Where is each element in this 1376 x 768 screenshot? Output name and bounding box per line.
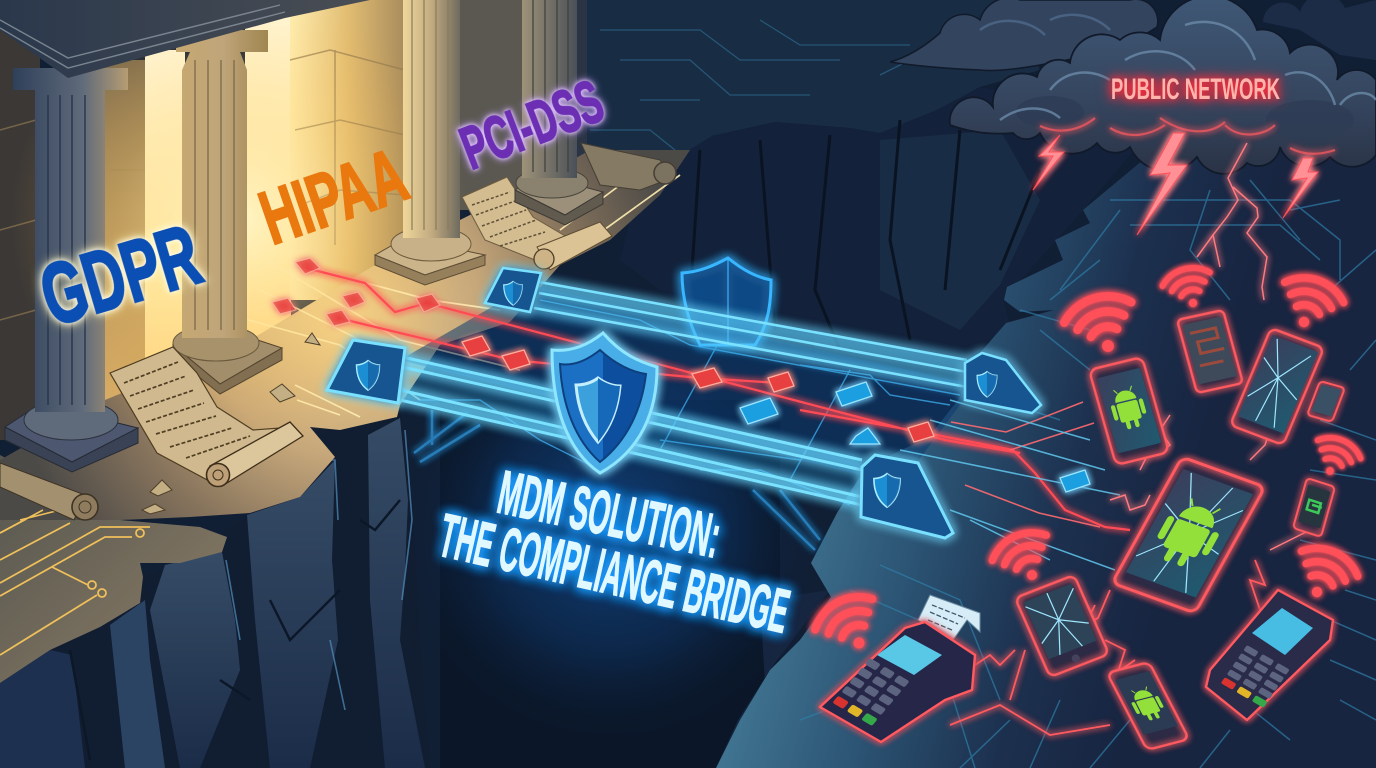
back shield	[682, 258, 771, 345]
anchor block: front right	[861, 455, 953, 538]
temple back wall	[0, 0, 587, 440]
title: MDM solution: MDM SOLUTION:	[492, 458, 726, 572]
pillar 3	[375, 0, 485, 285]
right land plateau	[716, 130, 1376, 768]
entablature	[0, 0, 370, 78]
label: GDPR: GDPR	[30, 208, 211, 344]
warm light glow	[0, 0, 620, 560]
title: MDM solution	[433, 458, 795, 647]
lower cliff, right side	[716, 590, 830, 768]
scroll: rear parchment	[462, 143, 676, 270]
main storm cloud	[950, 0, 1376, 174]
phone: android bottom	[1107, 662, 1189, 750]
POS terminal right	[1206, 590, 1333, 720]
label: PCI-DSS: PCI-DSS	[452, 67, 612, 182]
scroll: ledge roll	[0, 463, 98, 520]
red data packets	[272, 258, 934, 442]
lower rock ledge with gold traces	[0, 455, 227, 683]
main shield	[552, 333, 657, 473]
back storm clouds	[890, 0, 1376, 70]
back chasm cliff	[620, 87, 1160, 410]
center chasm	[370, 300, 850, 768]
tablet: large android	[1112, 457, 1265, 613]
phone: cracked	[1230, 328, 1324, 445]
device arcs	[950, 560, 1265, 735]
data lines	[306, 268, 1130, 570]
phone: android	[1089, 357, 1169, 465]
thin lightning	[1110, 143, 1310, 550]
bridge deck	[400, 285, 975, 505]
phone: small right	[1293, 478, 1335, 537]
phone: cracked lower	[1015, 575, 1109, 677]
anchor block: back left	[485, 268, 541, 312]
scroll: front parchment	[110, 347, 303, 486]
pillar 4	[515, 0, 603, 225]
anchor block: front left	[327, 340, 405, 403]
anchor block: back right	[965, 353, 1041, 413]
bridge rails	[398, 282, 967, 505]
far plateau with circuit traces	[560, 0, 1040, 172]
label: HIPAA: HIPAA	[250, 133, 417, 261]
wifi icons	[809, 263, 1364, 663]
bridge truss	[414, 410, 820, 550]
tablet: upper	[1177, 310, 1243, 393]
phone: small top	[1307, 381, 1345, 422]
lightning bolts	[1033, 133, 1318, 235]
blue data packets	[740, 382, 1090, 492]
text: THE COMPLIANCE BRIDGE	[433, 501, 795, 647]
rubble	[142, 333, 320, 514]
left cliff rock columns	[0, 410, 430, 768]
POS terminal left with receipt	[820, 595, 980, 742]
left temple floor	[0, 150, 690, 533]
pillar 1	[5, 68, 138, 472]
pillar 2	[173, 30, 282, 394]
